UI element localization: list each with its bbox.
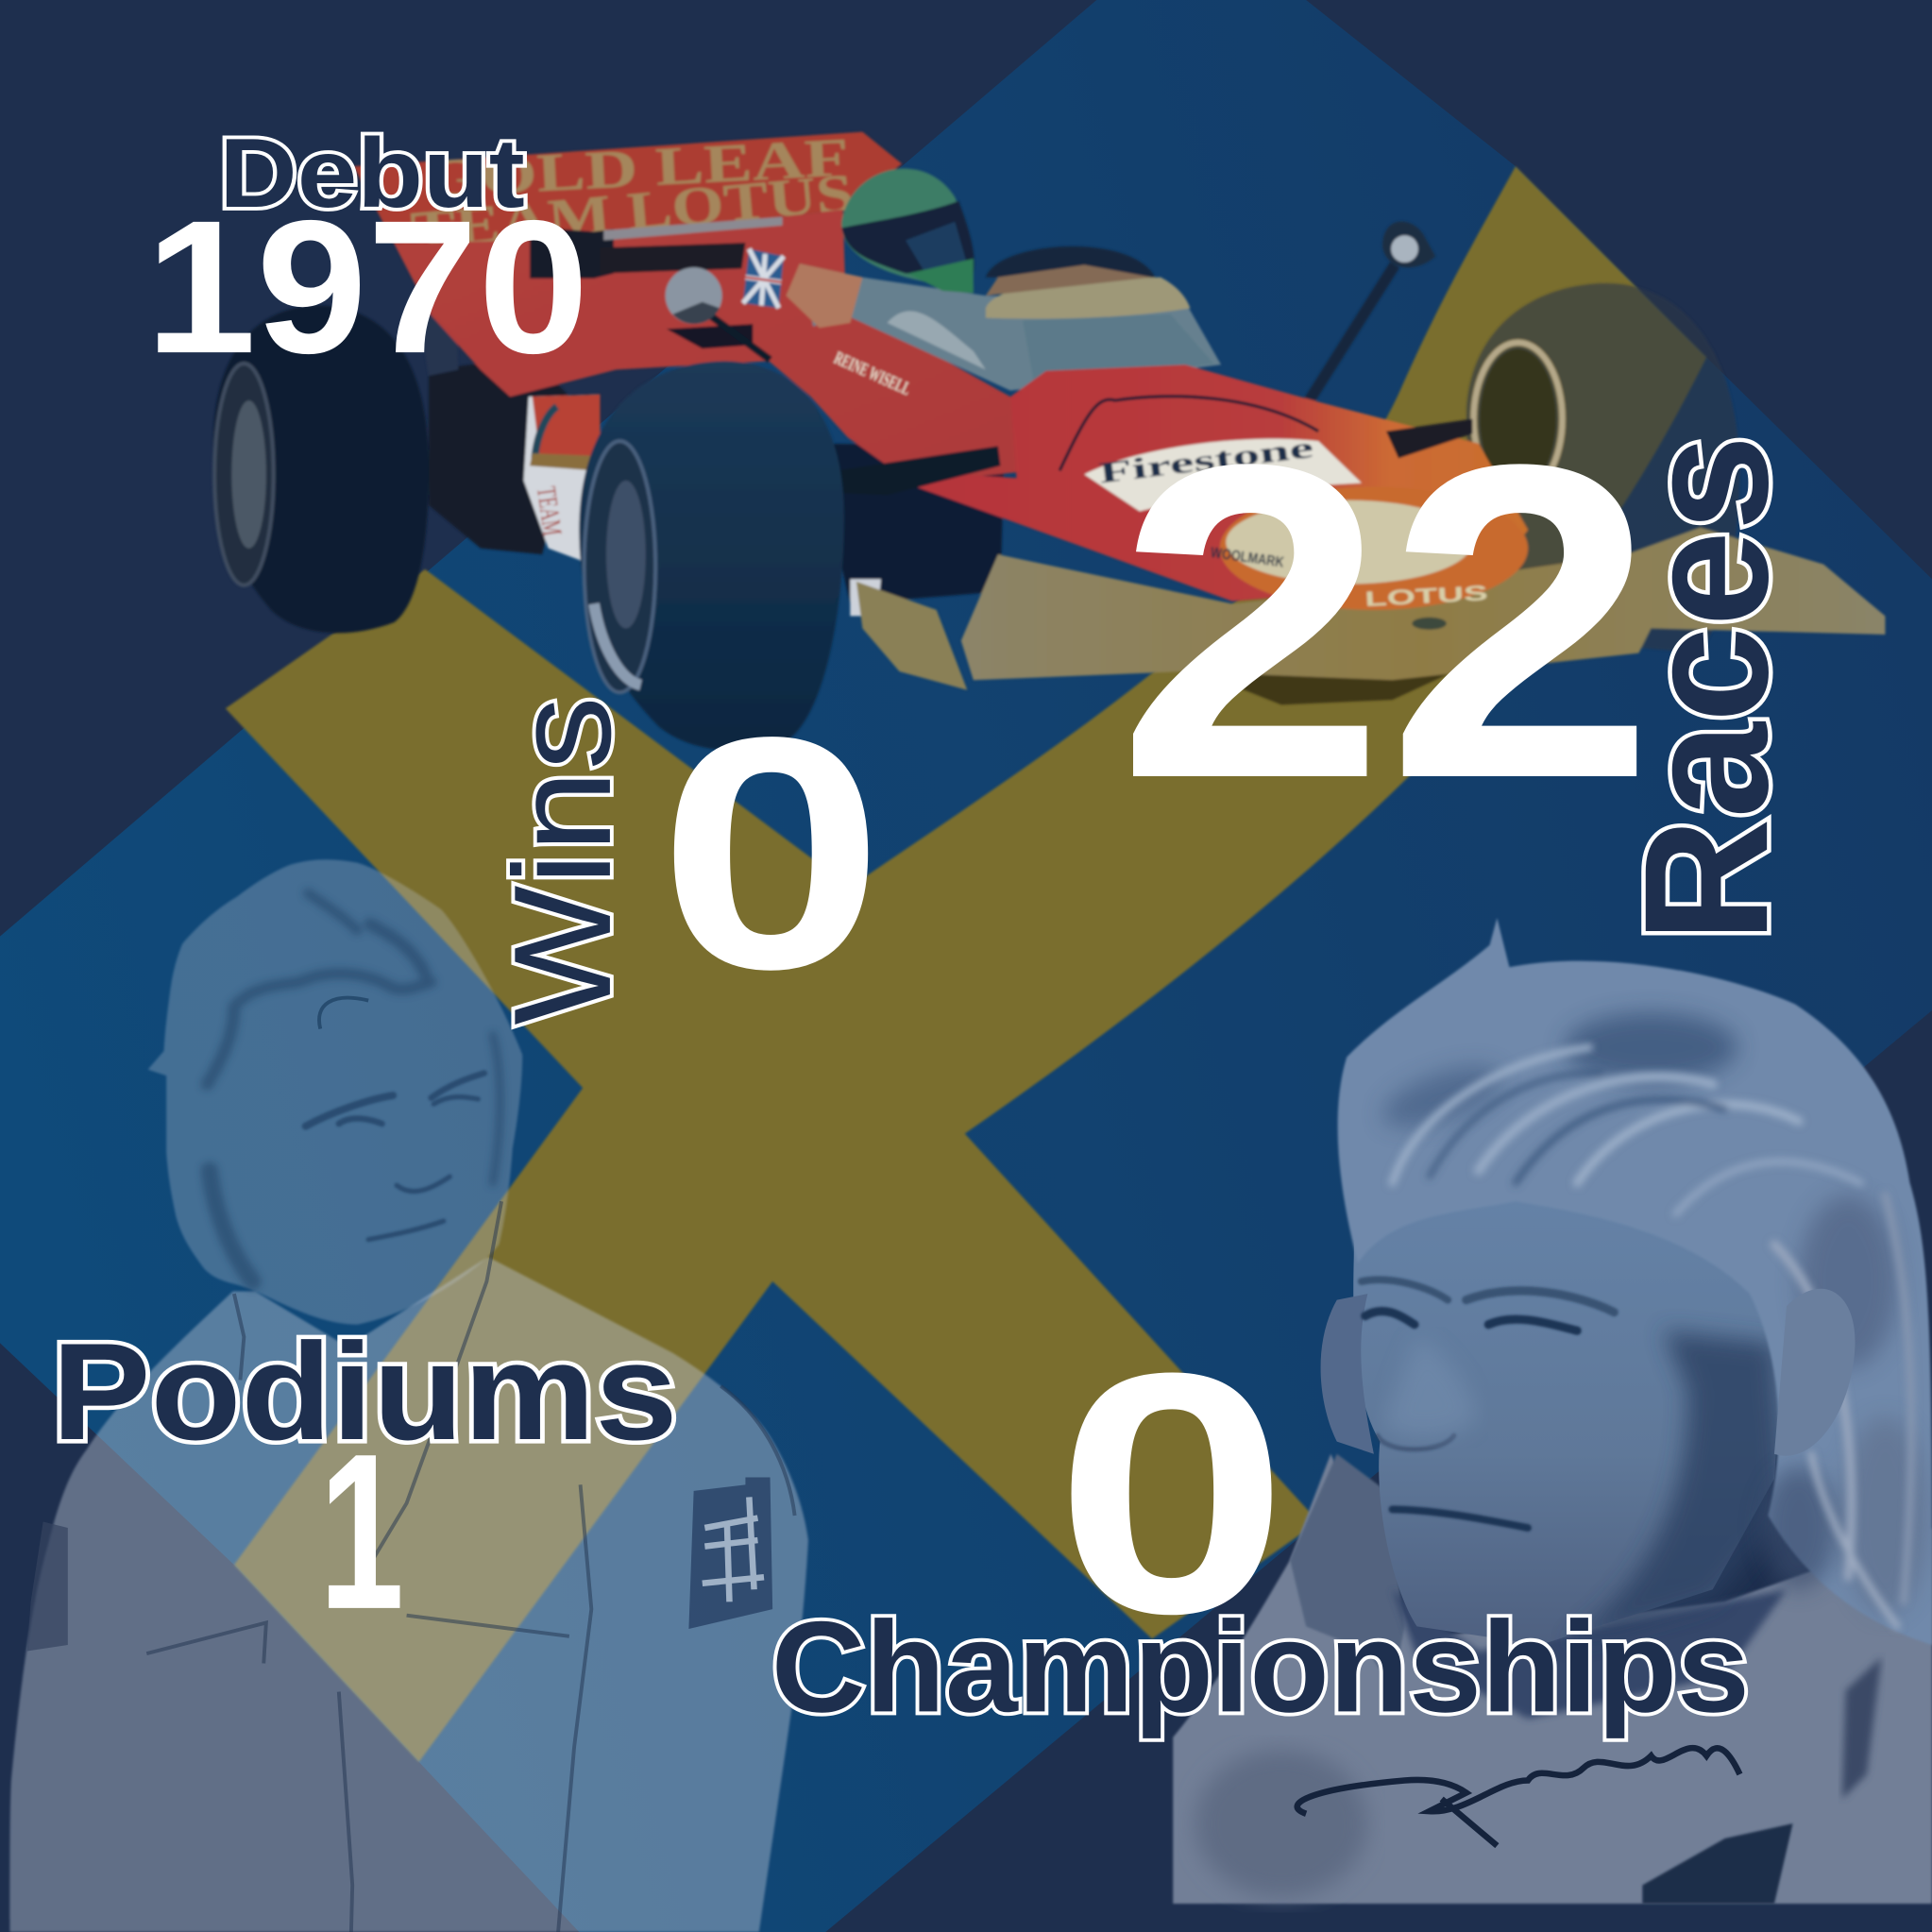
car: rear wing with lettering: TEAM LOTUS <box>409 163 856 262</box>
car: rear wing with lettering: GOLD LEAF <box>423 127 850 210</box>
car: rear left tyre <box>213 306 429 633</box>
right driver: cheek and beard shadow <box>1565 1330 1787 1645</box>
statistic: races number: 22 <box>1116 372 1656 872</box>
right driver: face <box>1353 1167 1787 1645</box>
car: hood and nose <box>902 364 1528 602</box>
left driver: facial features <box>306 1074 484 1240</box>
statistic: debut year: 1970 <box>145 180 589 393</box>
left driver: jacket <box>9 1257 808 1932</box>
right driver: signature <box>1297 1748 1739 1846</box>
right driver: neck shadow <box>1392 1589 1787 1719</box>
car: nose roundel <box>1210 486 1528 630</box>
right driver: left side hair <box>1321 1294 1374 1454</box>
left driver: hair shadows <box>207 893 500 1281</box>
background: yellow cross of flag <box>226 166 1706 1762</box>
statistic: championships number: 0 <box>1055 1302 1289 1685</box>
left driver: shoulder patch <box>27 1521 68 1651</box>
statistic: wins number: 0 <box>658 669 885 1038</box>
right driver: shirt shading <box>1195 1657 1882 1904</box>
left driver: head and hair <box>148 859 522 1325</box>
car: wishbone mechanism <box>836 446 1001 496</box>
car: driver name decal: REINE WISELL <box>831 348 913 399</box>
car: nose roundel: LOTUS <box>1364 581 1488 611</box>
car: main red hull <box>395 210 1059 483</box>
car: strut and suspension shadows <box>419 308 1004 616</box>
photo: right driver <box>1173 918 1932 1904</box>
statistic: championships label: Championships <box>771 1595 1750 1739</box>
right driver: eyes, nose and mouth <box>1362 1280 1614 1528</box>
photo: left driver <box>9 859 808 1932</box>
right driver: hair strands <box>1392 1047 1911 1626</box>
car: rear wing with lettering <box>353 127 902 262</box>
car: helmet <box>841 169 974 294</box>
right driver: hair <box>1338 918 1932 1645</box>
car: tan lower nose and front wings <box>856 527 1885 704</box>
car: nose roundel: WOOLMARK <box>1210 545 1285 571</box>
car: dark cooling slots <box>530 217 783 348</box>
right driver: collar <box>1290 1454 1405 1688</box>
statistic: podiums label: Podiums <box>52 1314 678 1468</box>
car: left mirror <box>666 267 771 360</box>
car: firestone decal: Firestone <box>1097 431 1315 489</box>
right driver: shirt <box>1173 1454 1932 1904</box>
right driver: dark hair patches <box>1376 1013 1928 1614</box>
car: front left tyre <box>579 361 844 750</box>
car: right mirror <box>1309 222 1435 401</box>
statistic: races label: Races <box>1607 435 1805 942</box>
left driver: hair curl <box>319 998 368 1029</box>
car: white side panel: TEAM <box>531 484 568 537</box>
statistic: podiums number: 1 <box>319 1407 404 1655</box>
left driver: collar and jacket seams <box>146 1201 795 1932</box>
car: firestone decal <box>1084 431 1362 512</box>
car: rear right tyre <box>1466 283 1739 653</box>
right driver: nose highlight <box>1382 1337 1479 1437</box>
car: hood seam <box>1059 397 1318 470</box>
left driver: sleeve patch <box>688 1478 772 1629</box>
right driver: ear <box>1774 1289 1856 1456</box>
car: union flag decal <box>743 249 784 308</box>
car: white side panel <box>524 395 600 565</box>
car: nose intake shadow <box>1386 419 1472 458</box>
car: windscreen and cockpit <box>786 246 1221 391</box>
photo: racing car <box>213 127 1885 750</box>
statistic: wins label: Wins <box>485 696 639 1025</box>
statistic: debut label: Debut <box>219 119 525 229</box>
